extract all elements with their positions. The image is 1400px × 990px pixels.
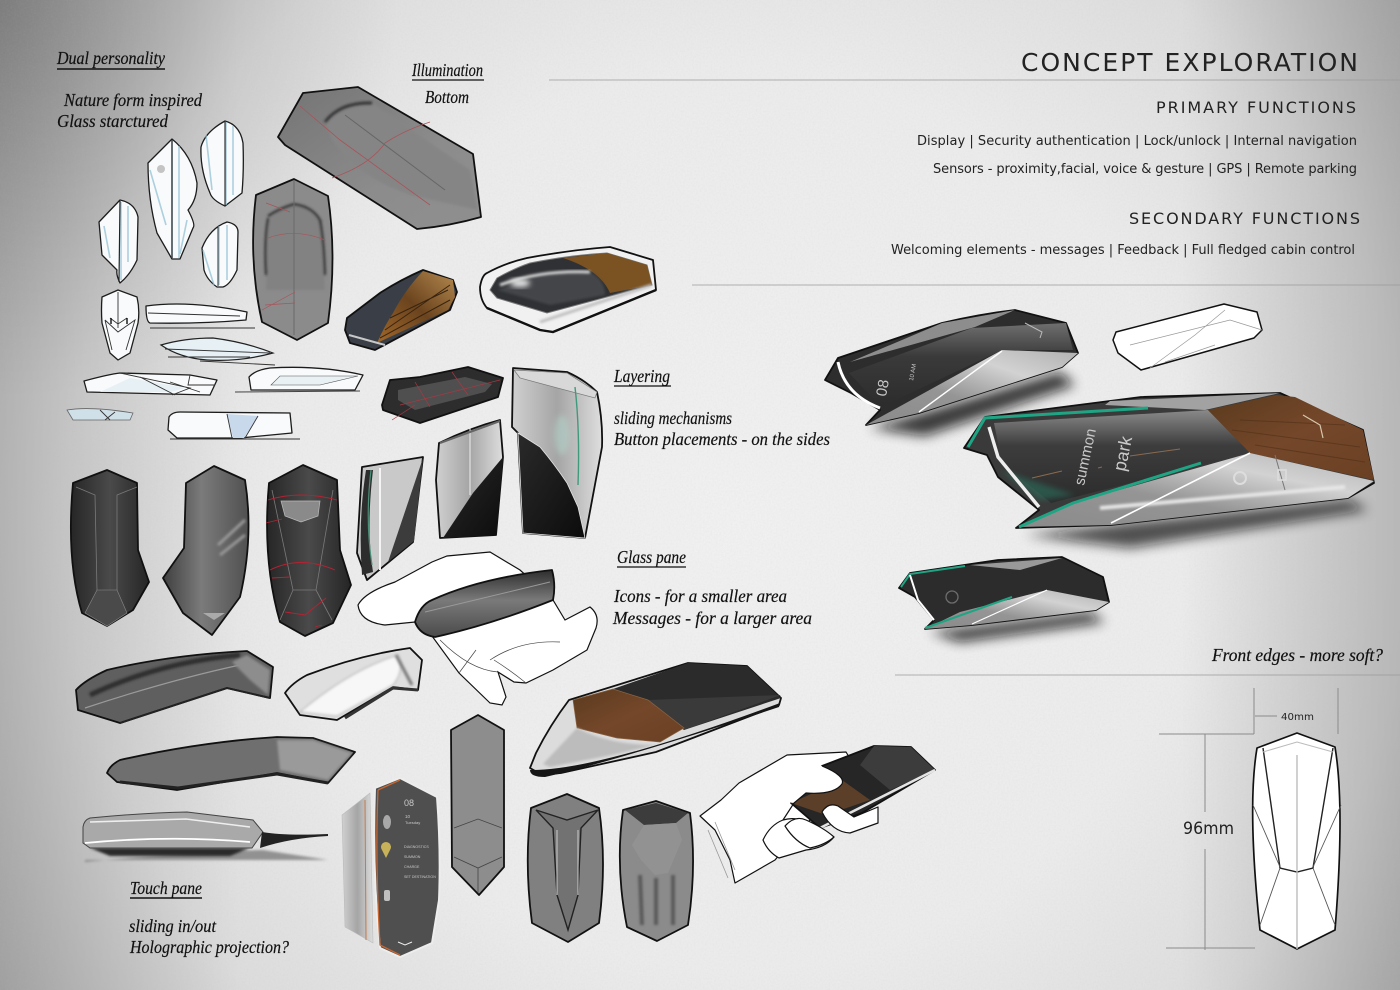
side sketch 7 <box>161 338 275 365</box>
fingers <box>763 819 834 858</box>
recess <box>325 103 478 210</box>
wood panel <box>1208 395 1374 480</box>
key render: holographic interface H: CHARGE <box>404 865 420 869</box>
primary functions line 1: Display | Security authentication | Lock/unlock | Internal navigation <box>917 134 1357 149</box>
phone body <box>791 746 935 828</box>
note: glass pane: Icons - for a smaller area <box>613 586 787 606</box>
note: touch pane: sliding in/out <box>129 916 217 936</box>
thumb over phone <box>770 760 843 803</box>
secondary functions line: Welcoming elements - messages | Feedback | Full fledged cabin control <box>891 243 1355 258</box>
key render: holographic interface H: SUMMON <box>404 855 421 859</box>
key render: tall layered <box>512 368 602 538</box>
note: layering: Layering <box>613 366 670 386</box>
note: front edges: Front edges - more soft? <box>1211 645 1383 665</box>
key sketch: illumination large angled <box>278 87 481 229</box>
side sketch 8 <box>84 373 217 395</box>
side sketch 9 <box>235 367 363 392</box>
key render: holographic interface H: DIAGNOSTICS <box>404 845 429 849</box>
key render: medium layered <box>436 420 503 538</box>
palm and sleeve <box>700 752 860 883</box>
note: glass pane <box>612 547 812 628</box>
key sketch: light chrome side E <box>285 648 422 720</box>
white side strip <box>989 427 1039 507</box>
key render: holographic interface H: 10 <box>405 814 411 819</box>
heading: primary functions: PRIMARY FUNCTIONS <box>1156 98 1356 117</box>
note: layering <box>613 366 830 449</box>
note: layering: sliding mechanisms <box>614 408 732 428</box>
outline sketch 4 <box>99 200 138 283</box>
note: dual personality: Glass starctured <box>57 111 169 131</box>
key sketch: dark flat <box>382 367 503 423</box>
dimension drawing <box>1159 688 1341 950</box>
key outline: white sketch <box>1113 304 1262 370</box>
key render: lower green <box>899 557 1109 642</box>
key sketch: long dark side D <box>76 651 273 723</box>
key sketch row: mid grey B <box>163 466 249 635</box>
shadow <box>870 372 1075 436</box>
label: 40mm: 40mm <box>1281 712 1314 723</box>
note: touch pane <box>129 878 289 957</box>
screen <box>994 410 1250 503</box>
note: layering: Button placements - on the sides <box>614 429 830 449</box>
key sketch row: dark top A <box>71 470 149 626</box>
key render: holographic interface H: Tuesday <box>405 820 420 825</box>
note: dual personality: Nature form inspired <box>63 90 203 110</box>
key sketch: long faceted <box>451 715 504 895</box>
outline sketch 2 <box>201 121 243 206</box>
silver top sliver <box>1105 393 1280 410</box>
key render: main large summon park: park <box>1109 433 1136 473</box>
key render: top right charcoal <box>825 310 1078 436</box>
key sketch row: crest top C <box>266 465 351 636</box>
key sketch: illumination vertical <box>253 179 332 340</box>
side sketch 6 <box>146 304 255 328</box>
primary functions line 2: Sensors - proximity,facial, voice & gesture | GPS | Remote parking <box>933 162 1357 177</box>
note: touch pane: Touch pane <box>130 878 202 898</box>
label: 96mm: 96mm <box>1183 819 1234 839</box>
key render: holographic interface H <box>342 778 440 957</box>
key render: main large summon park <box>964 393 1374 548</box>
dimension lines <box>1159 688 1338 950</box>
key render: holographic interface H: SET DESTINATION <box>404 875 436 879</box>
key sketch: grey pocket <box>620 801 693 941</box>
hand sketch holding key <box>358 552 597 705</box>
key sketch: grey spine <box>528 794 603 942</box>
clock readout: 08 <box>873 378 893 398</box>
sketch group: glass structured outlines <box>67 121 363 439</box>
key render: chrome frame with wood <box>480 247 656 332</box>
note: dual personality: Dual personality <box>56 48 165 68</box>
cast shadow <box>85 850 328 862</box>
heading: secondary functions: SECONDARY FUNCTIONS <box>1129 209 1360 228</box>
lower silver <box>1019 453 1374 527</box>
green light strips <box>968 408 1148 447</box>
key on hand <box>415 570 554 637</box>
title: CONCEPT EXPLORATION <box>1021 48 1358 77</box>
key sketch: long grey side F <box>107 737 355 790</box>
screen icons <box>383 815 391 829</box>
front screen <box>374 778 440 957</box>
outline sketch 3 <box>202 222 238 287</box>
key render: side layered <box>357 457 423 580</box>
key render: wood small <box>345 270 457 350</box>
key sketch: touch pane side view G <box>83 812 328 862</box>
note: illumination <box>411 60 484 107</box>
key render: top right charcoal: 10 AM <box>909 364 918 381</box>
side sketch 10 <box>67 409 133 420</box>
note: glass pane: Glass pane <box>617 547 686 567</box>
sliding pane <box>260 832 328 848</box>
shadow <box>1025 500 1368 548</box>
note: glass pane: Messages - for a larger area <box>612 608 812 628</box>
outline sketch 1 <box>148 139 197 259</box>
back body <box>342 793 373 943</box>
key render: wood boat <box>530 663 781 777</box>
note: dual personality <box>56 48 203 131</box>
cadillac style crest <box>281 501 320 522</box>
key front outline <box>1253 733 1341 949</box>
outline sketch 5: front <box>102 290 139 360</box>
screen labels: summon <box>1071 427 1100 487</box>
hand sketch holding wood key <box>700 746 935 883</box>
note: illumination: Bottom <box>425 87 469 107</box>
side sketch 11 <box>168 412 300 439</box>
note: illumination: Illumination <box>411 60 483 80</box>
panel: functions text <box>891 98 1360 258</box>
screen text: 08 <box>404 798 414 808</box>
note: touch pane: Holographic projection? <box>129 937 289 957</box>
button icons <box>1234 472 1246 484</box>
